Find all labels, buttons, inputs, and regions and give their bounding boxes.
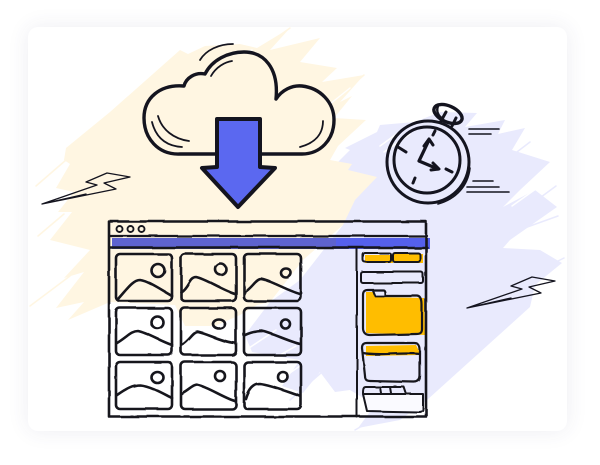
brush stroke: lavender — [245, 112, 564, 430]
dial — [394, 127, 460, 193]
sidebar: search field — [361, 272, 423, 283]
outer ring — [387, 121, 469, 203]
image thumbnails grid — [116, 254, 301, 409]
thumbnail row 1 — [116, 254, 301, 301]
brush stroke: yellow — [30, 28, 377, 326]
speed lines — [467, 129, 509, 192]
sidebar: open yellow folder — [363, 290, 422, 335]
cloud inner highlights — [152, 44, 323, 147]
lightning bolt right — [467, 277, 555, 308]
sidebar: tabbed folder — [363, 387, 423, 412]
hand-drawn linework — [109, 222, 427, 417]
thumbnail row 3 — [116, 362, 301, 409]
sidebar divider — [356, 248, 358, 417]
window frame — [109, 222, 426, 416]
blue toolbar — [112, 238, 430, 249]
cloud outline — [144, 52, 334, 154]
panel: card background — [28, 27, 567, 431]
clock hands — [419, 140, 438, 169]
sidebar fills — [365, 254, 425, 356]
sidebar: half filled folder — [362, 343, 420, 382]
stopwatch icon — [387, 101, 509, 204]
download arrow — [202, 119, 275, 207]
cloud download icon — [144, 44, 334, 207]
browser window — [109, 222, 430, 417]
window control dots — [116, 226, 144, 232]
thumbnail row 2 — [116, 308, 301, 355]
lightning bolt left — [42, 173, 130, 204]
sidebar: yellow tabs — [363, 253, 420, 262]
tick marks — [398, 131, 452, 183]
crown — [431, 101, 465, 127]
